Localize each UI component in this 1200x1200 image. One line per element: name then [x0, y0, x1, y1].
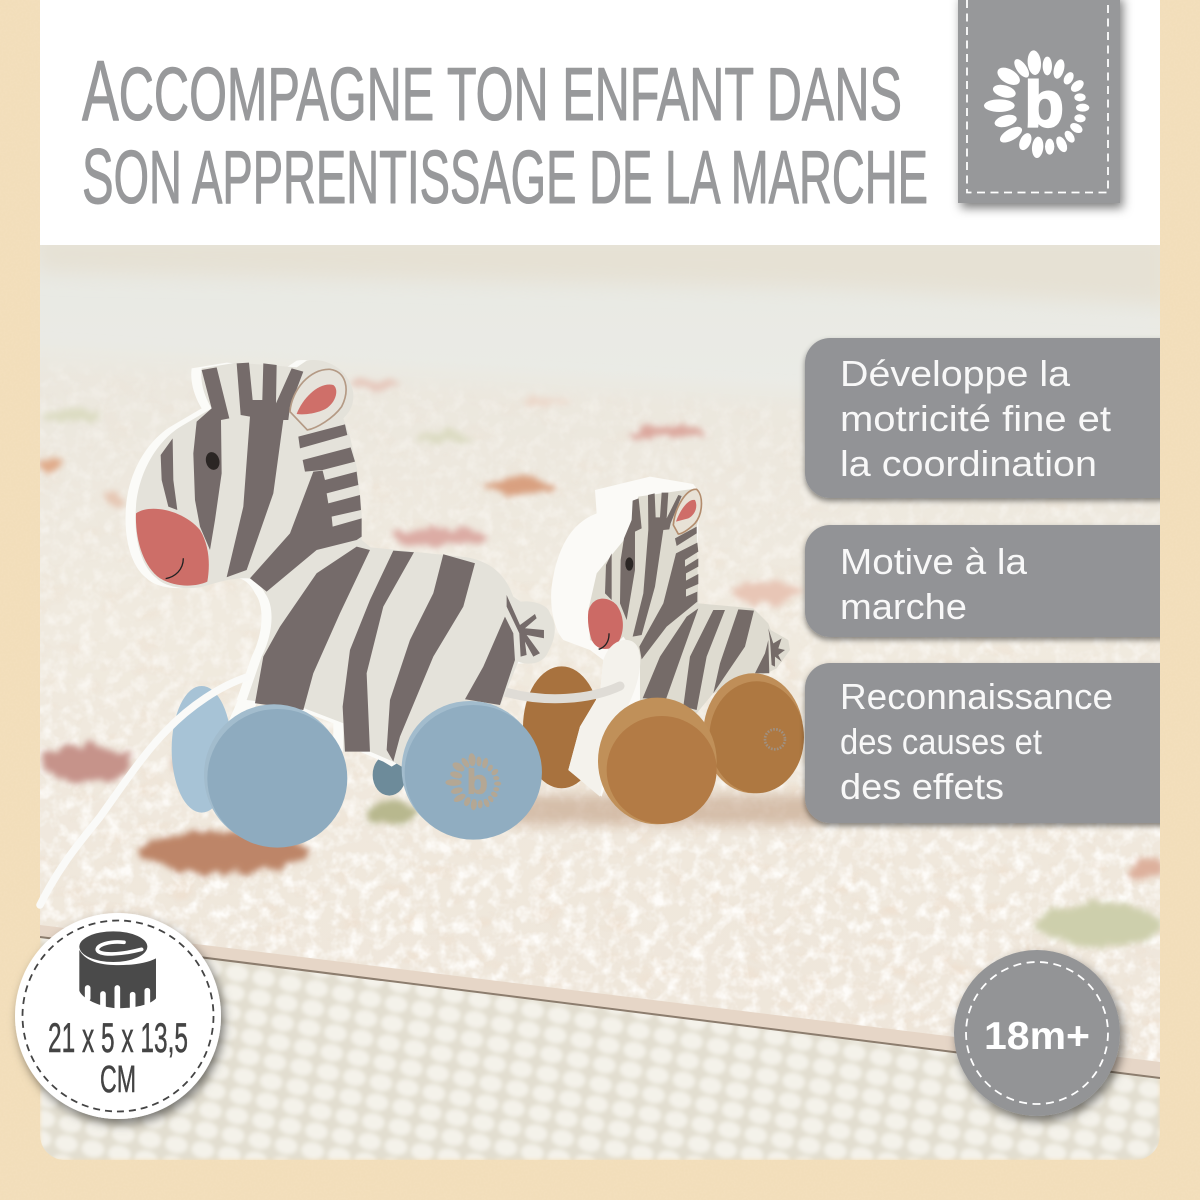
brand tag with logo	[958, 0, 1120, 203]
header panel	[40, 0, 1160, 245]
small zebra back-left wheel	[523, 666, 600, 788]
benefit tab: walking	[805, 525, 1170, 637]
benefit tab: motor skills: la coordination	[840, 443, 1097, 484]
small zebra toy	[523, 477, 804, 824]
big zebra front wheel	[204, 704, 347, 848]
icon: measuring tape	[79, 931, 156, 1010]
age badge: 18m+	[984, 1015, 1090, 1058]
size badge: CM	[100, 1059, 136, 1101]
big zebra smile	[166, 558, 183, 579]
small zebra back-right wheel	[703, 673, 804, 793]
benefit tab: cause and effect: des causes et	[840, 721, 1042, 762]
benefit tab: cause and effect	[805, 663, 1170, 823]
benefit tab: walking: Motive à la	[840, 541, 1028, 582]
benefit tab: motor skills: motricité fine et	[840, 398, 1111, 439]
icon: brand logo: b	[1024, 68, 1064, 141]
small zebra white side	[551, 477, 700, 797]
knitted blanket	[40, 930, 1160, 1160]
small zebra stripes	[605, 493, 785, 710]
benefit tab: cause and effect: Reconnaissance	[840, 676, 1113, 717]
pull string	[40, 677, 247, 905]
big zebra ear	[290, 369, 346, 430]
size badge	[15, 913, 221, 1119]
big zebra inner ear	[297, 385, 336, 414]
title	[82, 44, 928, 220]
benefit tab: walking: marche	[840, 586, 967, 627]
small zebra inner ear	[676, 500, 696, 522]
size badge: 21 x 5 x 13,5	[48, 1014, 188, 1061]
big zebra inner wheel	[373, 754, 406, 796]
big zebra back wheel	[172, 686, 232, 813]
big zebra nose	[136, 509, 209, 586]
icon: wheel logo	[445, 753, 501, 810]
big zebra body	[136, 360, 555, 767]
small zebra nose	[588, 599, 623, 649]
benefit tab: cause and effect: des effets	[840, 766, 1004, 807]
small zebra neck strap	[568, 640, 640, 797]
small zebra smile	[599, 633, 609, 649]
connecting string	[505, 686, 620, 699]
icon: wheel logo: b	[467, 764, 488, 802]
big zebra eye	[204, 451, 221, 471]
benefit tab: motor skills	[805, 338, 1170, 498]
big zebra rear wheel	[402, 701, 542, 840]
big zebra white edge	[126, 360, 545, 767]
small zebra eye	[625, 557, 633, 571]
rug underside band	[40, 925, 1160, 1078]
small zebra body	[588, 488, 790, 713]
icon: brand logo	[984, 50, 1089, 158]
big zebra stripes	[161, 363, 544, 762]
benefit tab: motor skills: Développe la	[840, 353, 1071, 394]
small zebra front wheel	[598, 698, 717, 824]
small zebra ear	[673, 489, 701, 534]
age badge	[954, 950, 1120, 1116]
big zebra toy	[126, 360, 555, 848]
photo: rug background	[0, 235, 1200, 1160]
